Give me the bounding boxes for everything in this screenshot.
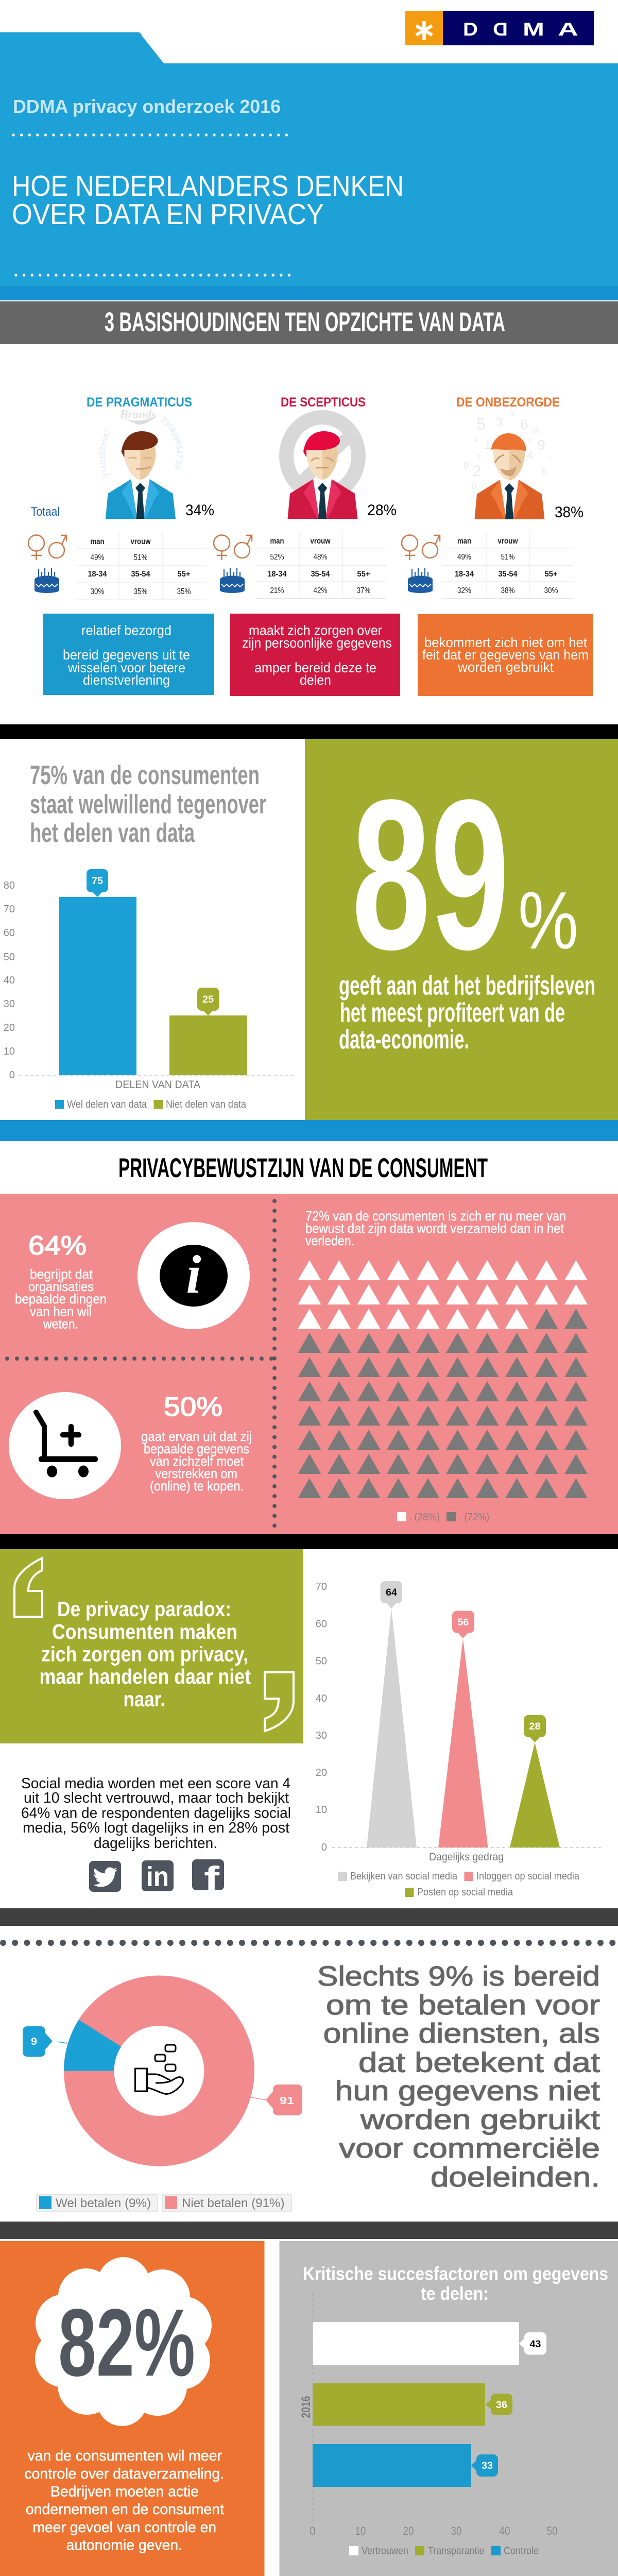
bubble 64: [380, 1581, 402, 1608]
panel: kritische succesfactoren: 40: [500, 2524, 510, 2537]
icon: info: [138, 1222, 250, 1329]
persona 3: onbezorgde illustration: 4: [474, 436, 478, 444]
main title: [12, 170, 404, 231]
stat: 50%: van zichzelf moet: [150, 1453, 244, 1469]
text: slechts 9%: voor commerciële: [339, 2133, 600, 2164]
chart: dagelijks gedrag: Dagelijks gedrag: [429, 1851, 504, 1863]
chart: dagelijks gedrag: 40: [316, 1693, 327, 1704]
bubble 36: [486, 2394, 512, 2415]
heading: 75% van de consumenten: 75% van de consumenten: [30, 760, 260, 790]
totals: 38%: [555, 504, 583, 521]
totals: 28%: [367, 502, 397, 519]
persona 3: onbezorgde illustration: 8: [542, 467, 546, 476]
bubble 9: 9: [31, 2036, 37, 2047]
chart: dagelijks gedrag: 30: [316, 1730, 327, 1741]
persona 3: onbezorgde illustration: 3: [496, 416, 503, 430]
text: slechts 9%: dat betekent dat: [358, 2047, 600, 2078]
bar: vertrouwen: [313, 2322, 519, 2365]
persona 3: onbezorgde illustration: 6: [520, 416, 528, 432]
totals: 34%: [185, 502, 214, 519]
icon: cloud: [35, 2257, 212, 2426]
stat: 64%: 64%: [28, 1231, 87, 1261]
panel: kritische succesfactoren: 50: [547, 2524, 557, 2537]
table: scepticus: 52%: [270, 553, 284, 562]
legend: Posten op social media: [417, 1887, 513, 1898]
legend: Vertrouwen: [362, 2546, 408, 2557]
persona 1: pragmaticus illustration: Brands: [119, 408, 156, 421]
chart: dagelijks gedrag: 0: [321, 1842, 327, 1853]
pictogram chart: triangles: [298, 1260, 588, 1498]
bar: wel delen: [59, 897, 136, 1075]
table: pragmaticus: man: [91, 537, 104, 546]
icon: cart: [9, 1392, 121, 1499]
table: onbezorgde: 35-54: [499, 570, 518, 579]
bubble 33: [471, 2454, 498, 2477]
table: scepticus: 21%: [270, 586, 284, 595]
panel: privacy paradox quote: maar handelen daar niet: [39, 1665, 251, 1688]
bubble 43: 43: [529, 2339, 541, 2350]
icon: info: i: [186, 1244, 201, 1304]
icon: twitter: [89, 1861, 121, 1892]
subtitle: DDMA privacy onderzoek 2016: [13, 96, 281, 117]
bubble 91: 91: [280, 2095, 294, 2107]
bar chart: delen van data: 40: [4, 975, 15, 986]
persona 3: onbezorgde illustration: 5: [476, 415, 486, 433]
legend: triangles: . (72%): [459, 1512, 489, 1523]
panel: 89%: %: [518, 875, 578, 966]
chart: dagelijks gedrag: 70: [316, 1581, 327, 1592]
bar chart: delen van data: 70: [4, 904, 15, 915]
chart: dagelijks gedrag: 20: [316, 1767, 327, 1778]
chart: dagelijks gedrag: [316, 1581, 601, 1898]
box: pragmaticus description: dienstverlening: [83, 672, 170, 688]
bubble 28: [524, 1715, 546, 1742]
logo: DDMA: [405, 11, 594, 45]
panel: 89%: [305, 739, 618, 1120]
box: scepticus description: delen: [300, 672, 331, 688]
legend: Wel delen van data: [67, 1099, 147, 1110]
text: slechts 9%: doeleinden.: [431, 2162, 600, 2193]
panel: header folder: [0, 32, 618, 300]
divider band: black: [0, 724, 618, 739]
table: scepticus: 48%: [313, 553, 328, 562]
panel: 89%: 89: [352, 755, 509, 994]
table: pragmaticus: 35%: [177, 587, 191, 596]
panel: 82%: [0, 2241, 265, 2576]
heading: 75% van de consumenten: [30, 760, 266, 848]
box: onbezorgde description: bekommert zich niet om het: [424, 635, 587, 650]
table: onbezorgde: 51%: [501, 553, 515, 562]
value bubble 75: [87, 869, 108, 897]
icon: linkedin: in: [146, 1861, 169, 1892]
legend: Bekijken van social media: [350, 1871, 458, 1882]
panel: kritische succesfactoren: [279, 2241, 618, 2576]
icon: facebook: [192, 1859, 224, 1897]
bubble 28: 28: [529, 1721, 541, 1732]
panel: privacy paradox quote: Consumenten maken: [52, 1620, 237, 1643]
text: controle: ondernemen en de consument: [26, 2501, 224, 2518]
bar chart: delen van data: 50: [4, 952, 15, 963]
totals: Totaal: [31, 505, 60, 519]
table: pragmaticus: 55+: [177, 570, 191, 579]
text: social media: uit 10 slecht vertrouwd, maar toch bekijkt: [24, 1790, 289, 1806]
bar: controle: [313, 2444, 471, 2487]
panel: kritische succesfactoren: 10: [355, 2524, 366, 2537]
bubble 33: 33: [482, 2461, 493, 2471]
text: slechts 9%: worden gebruikt: [360, 2105, 600, 2136]
box: scepticus description: zijn persoonlijke gegevens: [242, 635, 392, 651]
bar chart: delen van data: [4, 869, 296, 1110]
table: pragmaticus: 18-34: [88, 570, 107, 579]
table: onbezorgde: vrouw: [497, 537, 518, 546]
box: scepticus description: amper bereid deze te: [254, 660, 376, 675]
persona 3: onbezorgde illustration: 0: [472, 482, 476, 491]
stat: 50%: bepaalde gegevens: [144, 1441, 249, 1456]
value bubble 25: [197, 988, 219, 1015]
table: pragmaticus: 35%: [134, 587, 147, 596]
legend: [55, 1099, 247, 1110]
stat: 64%: van hen wil: [30, 1304, 92, 1319]
stat: 64%: begrijpt dat: [30, 1266, 93, 1282]
panel: privacy paradox quote: [0, 1549, 303, 1743]
divider band: dark: [0, 1908, 618, 1926]
text: controle: controle over dataverzameling.: [25, 2466, 224, 2482]
text: 72%: [305, 1208, 566, 1248]
stat: 50%: [141, 1392, 252, 1494]
table: pragmaticus: 49%: [91, 553, 104, 562]
bar: transparantie: [313, 2383, 485, 2426]
box: onbezorgde description: [418, 614, 593, 696]
persona 3: onbezorgde illustration: 6: [548, 456, 552, 462]
text: social media: Social media worden met een score van 4: [21, 1775, 290, 1792]
table: scepticus: vrouw: [310, 537, 331, 546]
donut chart: betalen: [23, 2001, 302, 2141]
persona titles: DE ONBEZORGDE: [456, 395, 560, 410]
box: scepticus description: [230, 614, 400, 696]
text: slechts 9%: online diensten, als: [323, 2018, 600, 2049]
chart: dagelijks gedrag: 60: [316, 1619, 327, 1630]
stat: 50%: verstrekken om: [156, 1466, 237, 1481]
bubble 64: 64: [386, 1587, 397, 1598]
table: pragmaticus: 51%: [134, 553, 147, 562]
text: controle: [25, 2448, 224, 2554]
panel: kritische succesfactoren: te delen:: [421, 2283, 489, 2304]
stat: 50%: gaat ervan uit dat zij: [141, 1429, 252, 1444]
bar chart: delen van data: 10: [4, 1046, 15, 1057]
divider band: dark 2: [0, 2222, 618, 2239]
text: 72%: verleden.: [305, 1233, 354, 1248]
box: pragmaticus description: bereid gegevens uit te: [63, 647, 190, 663]
slice: wel betalen: [64, 2020, 121, 2071]
table: pragmaticus: 30%: [91, 587, 104, 596]
persona 2: scepticus illustration: [286, 417, 358, 519]
persona 3: onbezorgde illustration: [463, 409, 552, 519]
text: social media: [21, 1775, 291, 1852]
bubble 43: [519, 2332, 546, 2354]
persona 3: onbezorgde illustration: 9: [510, 409, 514, 417]
icons: gender and cake, persona 3: [402, 535, 440, 593]
table: onbezorgde: [442, 532, 573, 599]
legend: Transparantie: [428, 2546, 484, 2557]
persona 1: pragmaticus illustration: [99, 408, 182, 519]
persona 1: pragmaticus illustration: 37451928547: [99, 429, 110, 478]
stat: 64%: [15, 1231, 107, 1332]
icons: gender and cake, persona 1: [28, 535, 66, 593]
legend: donut: Niet betalen (91%): [182, 2196, 284, 2210]
panel: privacy paradox quote: De privacy paradox:: [57, 1597, 231, 1621]
stat: 64%: organisaties: [28, 1279, 94, 1294]
icons: gender and cake, persona 2: [214, 535, 252, 593]
peak: bekijken: [367, 1608, 417, 1848]
text: social media: media, 56% logt dagelijks in en 28% post: [23, 1820, 289, 1836]
text: social media: dagelijks berichten.: [94, 1835, 217, 1852]
panel: 89%: data-economie.: [339, 1025, 469, 1055]
bar chart: delen van data: 20: [4, 1022, 15, 1033]
stat: 64%: bepaalde dingen: [15, 1291, 107, 1307]
text: 72%: bewust dat zijn data wordt verzameld dan in het: [305, 1221, 564, 1236]
text: slechts 9%: om te betalen voor: [326, 1990, 600, 2021]
panel: 82%: 82%: [58, 2290, 195, 2396]
stat: 64%: weten.: [43, 1316, 78, 1332]
bar chart: delen van data: 60: [4, 927, 15, 939]
bar chart: delen van data: 0: [9, 1070, 15, 1081]
persona titles: [87, 395, 560, 410]
table: onbezorgde: man: [457, 537, 471, 546]
table: pragmaticus: vrouw: [131, 537, 151, 546]
panel: privacy paradox quote: naar.: [124, 1687, 165, 1711]
box: pragmaticus description: [43, 614, 214, 695]
text: controle: meer gevoel van controle en: [33, 2519, 216, 2536]
bar chart: delen van data: 80: [4, 880, 15, 891]
legend: Niet delen van data: [166, 1099, 247, 1110]
persona 3: onbezorgde illustration: 1: [484, 438, 491, 452]
legend: [338, 1871, 580, 1898]
logo: DDMA: D: [493, 19, 508, 40]
table: scepticus: 18-34: [268, 570, 287, 579]
bar chart: delen van data: 30: [4, 998, 15, 1010]
value bubble 25: 25: [202, 994, 214, 1005]
main title: OVER DATA EN PRIVACY: [12, 198, 324, 231]
chart: dagelijks gedrag: 10: [316, 1804, 327, 1816]
table: scepticus: 42%: [313, 586, 328, 595]
logo: DDMA: D: [463, 19, 478, 40]
legend: [349, 2546, 539, 2557]
table: onbezorgde: 30%: [544, 586, 558, 595]
text: social media: 64% van de respondenten dagelijks social: [21, 1805, 291, 1822]
table: pragmaticus: [76, 532, 206, 599]
totals: [31, 502, 583, 521]
table: onbezorgde: 38%: [501, 586, 515, 595]
text: slechts 9%: [317, 1961, 600, 2193]
table: onbezorgde: 49%: [457, 553, 471, 562]
box: scepticus description: maakt zich zorgen over: [249, 623, 382, 638]
text: controle: autonomie geven.: [66, 2537, 182, 2554]
table: scepticus: 55+: [357, 570, 370, 579]
box: onbezorgde description: worden gebruikt: [457, 659, 554, 675]
logo: DDMA: A: [558, 19, 578, 40]
stat: 50%: 50%: [164, 1392, 222, 1422]
panel: privacy paradox quote: zich zorgen om privacy,: [41, 1642, 248, 1666]
persona 3: onbezorgde illustration: 3: [528, 436, 532, 444]
table: pragmaticus: 35-54: [131, 570, 150, 579]
text: controle: Bedrijven moeten actie: [50, 2484, 199, 2500]
persona 1: pragmaticus illustration: 2308208347 56: [161, 417, 182, 469]
divider band: blue: [0, 1120, 618, 1141]
table: scepticus: man: [270, 537, 284, 546]
panel: privacy awareness: [0, 1194, 618, 1534]
table: onbezorgde: 18-34: [455, 570, 474, 579]
legend: triangles: . (28%): [409, 1512, 440, 1523]
heading: 75% van de consumenten: het delen van data: [30, 818, 195, 848]
peak: posten: [510, 1742, 560, 1848]
persona 3: onbezorgde illustration: 3: [477, 453, 481, 461]
box: pragmaticus description: wisselen voor betere: [67, 660, 185, 675]
chart: dagelijks gedrag: 50: [316, 1656, 327, 1667]
logo: DDMA: M: [523, 19, 544, 40]
table: scepticus: [255, 532, 386, 599]
bar: niet delen: [169, 1015, 247, 1075]
table: onbezorgde: 32%: [457, 586, 471, 595]
value bubble 75: 75: [92, 876, 103, 887]
text: controle: van de consumenten wil meer: [28, 2448, 222, 2464]
persona 3: onbezorgde illustration: 9: [537, 437, 545, 453]
legend: Inloggen op social media: [476, 1871, 580, 1882]
icon: hand with coins: [135, 2045, 183, 2094]
legend: triangles: [397, 1512, 489, 1523]
panel: kritische succesfactoren: 2016: [299, 2396, 313, 2418]
bubble 56: [452, 1611, 474, 1638]
panel: kritische succesfactoren: 30: [451, 2524, 461, 2537]
text: slechts 9%: Slechts 9% is bereid: [317, 1961, 600, 1992]
persona 3: onbezorgde illustration: 9: [463, 460, 469, 471]
text: 72%: 72% van de consumenten is zich er nu meer van: [305, 1208, 566, 1224]
legend: Controle: [504, 2546, 539, 2557]
stat: 50%: (online) te kopen.: [150, 1478, 244, 1494]
bubble 36: 36: [496, 2400, 507, 2411]
heading band: 3 basishoudingen: [0, 301, 618, 344]
bar chart: delen van data: DELEN VAN DATA: [115, 1079, 200, 1091]
bubble 91: [251, 2084, 302, 2115]
peak: inloggen: [438, 1638, 488, 1848]
table: onbezorgde: 55+: [545, 570, 557, 579]
table: scepticus: 35-54: [311, 570, 330, 579]
panel: kritische succesfactoren: 0: [310, 2524, 315, 2537]
main title: HOE NEDERLANDERS DENKEN: [12, 170, 404, 202]
bubble 56: 56: [457, 1617, 469, 1628]
legend: donut: [37, 2194, 291, 2211]
panel: kritische succesfactoren: 20: [403, 2524, 414, 2537]
heading: 75% van de consumenten: staat welwillend tegenover: [30, 790, 266, 820]
persona 3: onbezorgde illustration: 0: [534, 426, 539, 435]
text: slechts 9%: hun gegevens niet: [335, 2075, 600, 2106]
icon: facebook: f: [204, 1859, 220, 1897]
box: pragmaticus description: relatief bezorgd: [81, 623, 171, 638]
persona 3: onbezorgde illustration: 4: [527, 449, 533, 462]
box: onbezorgde description: feit dat er gegevens van hem: [422, 647, 589, 663]
bubble 9: [23, 2026, 67, 2057]
persona 3: onbezorgde illustration: 2: [473, 463, 481, 480]
table: scepticus: 37%: [356, 586, 371, 595]
legend: donut: Wel betalen (9%): [56, 2196, 151, 2210]
divider band: black 2: [0, 1534, 618, 1549]
persona titles: DE PRAGMATICUS: [87, 395, 192, 410]
persona titles: DE SCEPTICUS: [281, 395, 366, 410]
